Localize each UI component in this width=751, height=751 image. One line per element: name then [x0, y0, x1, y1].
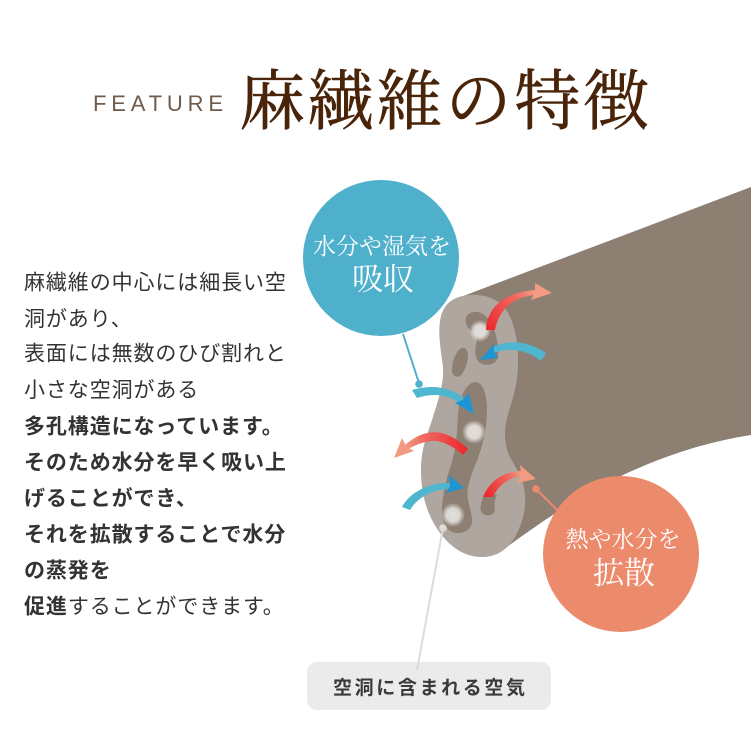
body text: 促進することができます。	[24, 596, 285, 618]
body text: そのため水分を早く吸い上	[24, 452, 287, 474]
fiber diagram	[394, 187, 751, 557]
body text: 麻繊維の中心には細長い空	[24, 272, 287, 294]
callout: absorb: 水分や湿気を	[313, 234, 451, 259]
body text	[24, 272, 287, 618]
callout: diffuse: 熱や水分を	[566, 527, 680, 552]
body text: 洞があり、	[24, 308, 133, 331]
fiber cross-section	[421, 295, 525, 557]
pointer: diffuse	[532, 485, 560, 513]
callout: diffuse: 拡散	[593, 556, 655, 591]
body text: げることができ、	[24, 486, 198, 510]
title: FEATURE	[93, 91, 223, 116]
label: air in cavities	[307, 662, 551, 710]
body text: 小さな空洞がある	[24, 379, 199, 402]
cavities	[442, 312, 498, 533]
body text: それを拡散することで水分	[24, 524, 286, 546]
callout: diffuse	[543, 476, 699, 632]
title: 麻繊維の特徴	[239, 66, 649, 139]
body text: 表面には無数のひび割れと	[24, 342, 287, 366]
diffuse arrowheads	[394, 283, 552, 483]
pointer: absorb	[403, 334, 423, 388]
callout: absorb	[303, 180, 459, 336]
diffuse arrows	[405, 290, 535, 497]
absorb arrowheads	[446, 344, 498, 493]
callout: absorb: 吸収	[352, 262, 414, 297]
label: air in cavities: 空洞に含まれる空気	[333, 677, 525, 699]
pointer: air	[417, 524, 447, 670]
body text: 多孔構造になっています。	[24, 416, 284, 438]
air bubbles	[441, 320, 491, 527]
fiber body	[458, 187, 751, 552]
body text: の蒸発を	[24, 560, 112, 582]
absorb arrows	[402, 342, 546, 510]
